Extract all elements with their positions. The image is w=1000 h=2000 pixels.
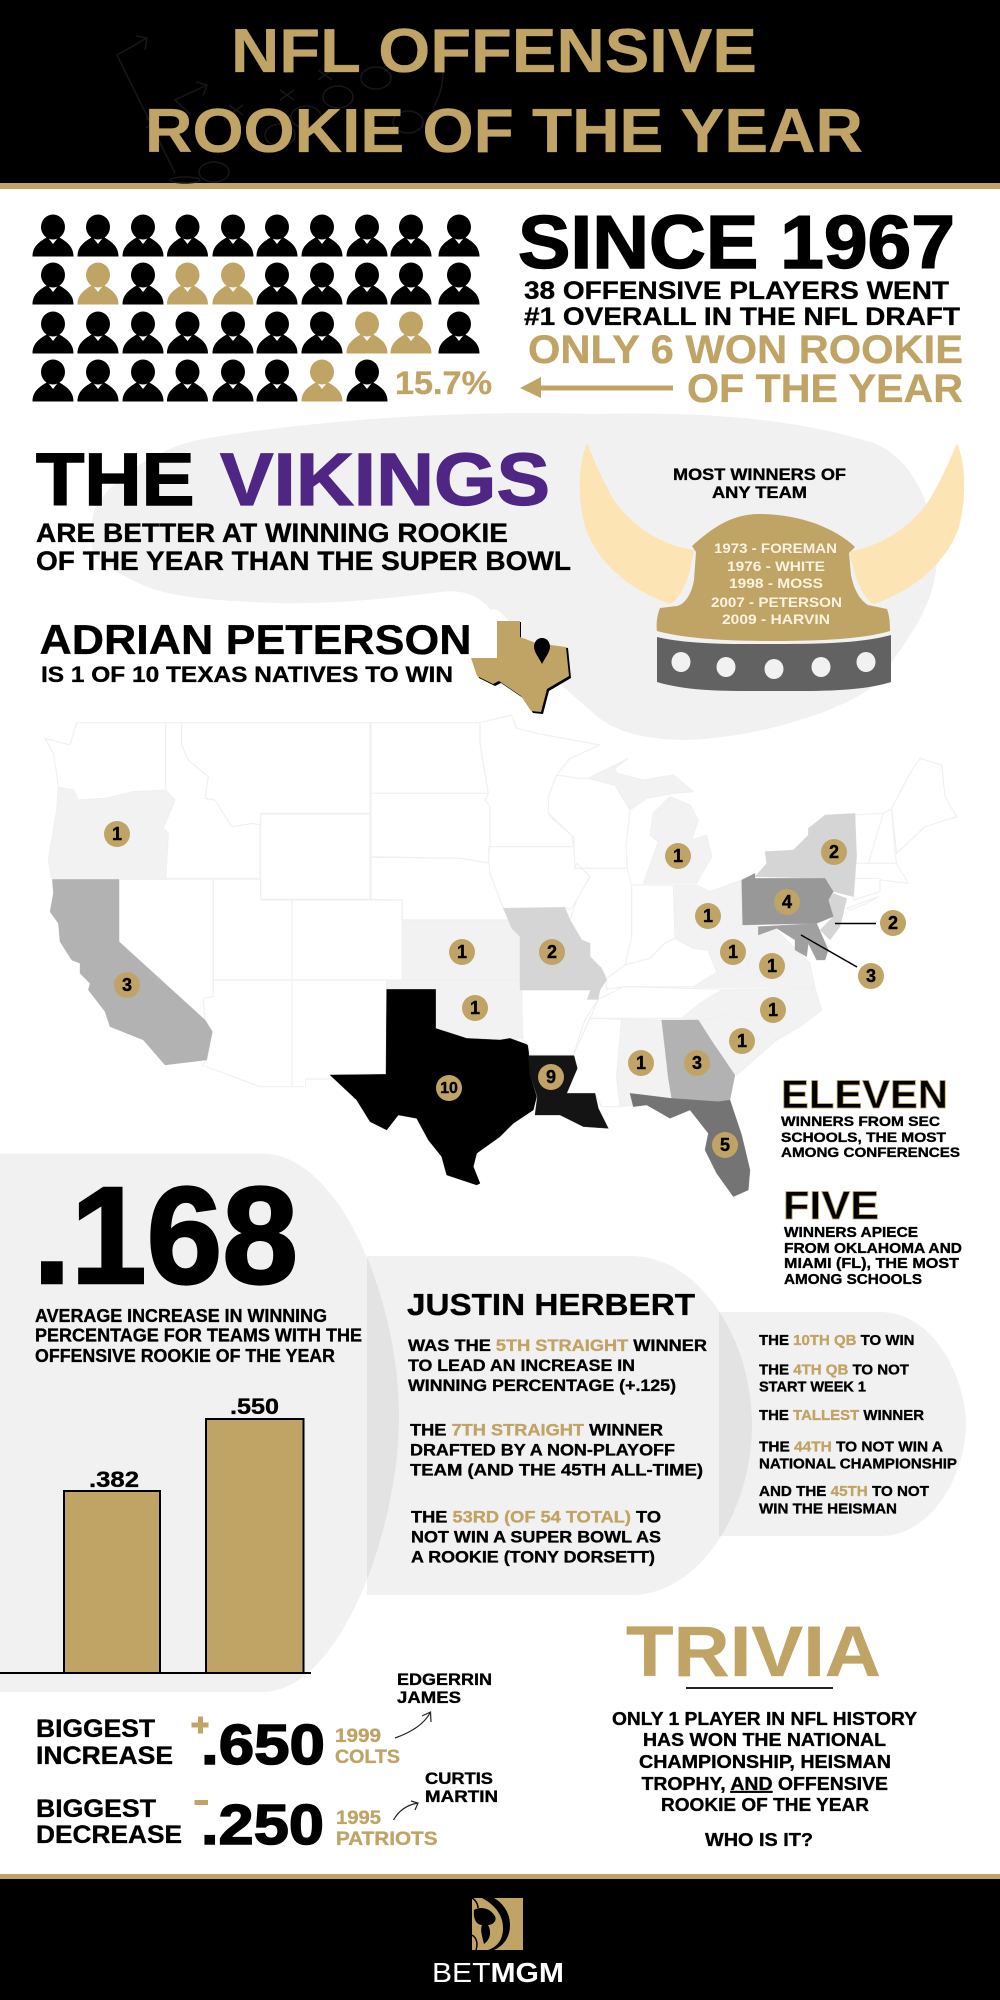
play diagram background — [117, 36, 443, 183]
badge: oregon — [104, 821, 130, 847]
badge: missouri: 2 — [547, 942, 557, 962]
arrow: to curtis martin — [394, 1801, 418, 1820]
five callout: FIVE — [783, 1184, 879, 1228]
badge: california — [114, 972, 140, 998]
herbert list: START WEEK 1 — [759, 1378, 866, 1396]
title: ROOKIE OF THE YEAR — [145, 96, 863, 166]
badge: kansas — [449, 939, 475, 965]
badge: west virginia: 1 — [728, 942, 738, 962]
badge: north carolina — [760, 997, 786, 1023]
big stat .168: .168 — [33, 1159, 298, 1313]
badge: texas: 10 — [440, 1080, 458, 1097]
herbert fact 3: NOT WIN A SUPER BOWL AS — [411, 1528, 661, 1546]
eleven callout: ELEVEN — [781, 1073, 948, 1117]
herbert fact 2 — [410, 1422, 703, 1480]
five callout: FROM OKLAHOMA AND — [784, 1241, 962, 1257]
biggest increase row: COLTS — [335, 1747, 400, 1768]
gold callout: OF THE YEAR — [687, 367, 963, 411]
adrian peterson heading: ADRIAN PETERSON — [40, 616, 472, 663]
herbert fact 2: DRAFTED BY A NON-PLAYOFF — [410, 1442, 675, 1460]
bar .550: .550 — [230, 1394, 279, 1419]
biggest decrease row: 1995 — [336, 1808, 381, 1829]
biggest decrease row: PATRIOTS — [336, 1829, 438, 1850]
herbert list: AND THE 45TH TO NOT — [759, 1483, 929, 1500]
badge: ohio — [695, 903, 721, 929]
badge: pennsylvania — [774, 889, 800, 915]
badge: maryland: 3 — [866, 966, 876, 986]
biggest increase row: BIGGEST — [36, 1715, 155, 1743]
herbert fact 2: THE 7TH STRAIGHT WINNER — [410, 1422, 663, 1440]
trivia question: ONLY 1 PLAYER IN NFL HISTORY — [612, 1709, 917, 1729]
right horn — [848, 443, 964, 604]
pictogram: people grid — [32, 214, 480, 402]
stat description: AVERAGE INCREASE IN WINNING — [35, 1306, 327, 1326]
badge: virginia — [759, 953, 785, 979]
trivia question: CHAMPIONSHIP, HEISMAN — [639, 1752, 891, 1772]
eleven callout: AMONG CONFERENCES — [781, 1144, 960, 1160]
betmgm wordmark: BETMGM — [432, 1957, 564, 1988]
curtis martin label — [425, 1770, 498, 1806]
badge: florida — [712, 1132, 738, 1158]
badge: missouri — [539, 939, 565, 965]
herbert fact 1: TO LEAD AN INCREASE IN — [408, 1357, 635, 1375]
gold callout — [528, 328, 963, 411]
edgerrin james label: EDGERRIN — [397, 1671, 492, 1689]
rivets — [672, 652, 876, 679]
bar .550 — [206, 1394, 304, 1673]
vikings heading — [36, 438, 550, 521]
draft text: #1 OVERALL IN THE NFL DRAFT — [524, 303, 960, 331]
badge: north carolina: 1 — [768, 1000, 778, 1020]
herbert list: THE 44TH TO NOT WIN A — [759, 1438, 943, 1456]
vikings winners list: 2007 - PETERSON — [711, 594, 842, 610]
herbert fact 3 — [411, 1508, 661, 1566]
header band — [0, 0, 1000, 189]
badge: ohio: 1 — [703, 906, 713, 926]
biggest increase row: INCREASE — [36, 1742, 173, 1770]
badge: oklahoma: 1 — [470, 998, 480, 1018]
five callout — [783, 1184, 962, 1288]
leader lines — [801, 924, 876, 967]
badge: pennsylvania: 4 — [782, 892, 792, 912]
vikings subtext: OF THE YEAR THAN THE SUPER BOWL — [36, 546, 571, 576]
biggest decrease row: DECREASE — [36, 1821, 182, 1849]
badge: louisiana — [538, 1064, 564, 1090]
eleven callout: SCHOOLS, THE MOST — [781, 1129, 946, 1145]
biggest decrease row — [36, 1793, 438, 1857]
trivia question: WHO IS IT? — [705, 1830, 813, 1850]
adrian peterson subtext: IS 1 OF 10 TEXAS NATIVES TO WIN — [41, 662, 453, 687]
helmet heading: MOST WINNERS OF — [673, 466, 846, 484]
badge: florida: 5 — [720, 1135, 730, 1155]
trivia question: HAS WON THE NATIONAL — [643, 1730, 886, 1750]
draft text: 38 OFFENSIVE PLAYERS WENT — [524, 277, 949, 305]
left horn — [580, 443, 694, 604]
draft text — [524, 277, 960, 331]
stat description: OFFENSIVE ROOKIE OF THE YEAR — [35, 1346, 335, 1366]
biggest increase row: 1999 — [335, 1726, 381, 1747]
herbert fact 3: A ROOKIE (TONY DORSETT) — [411, 1548, 655, 1566]
badge: louisiana: 9 — [546, 1067, 556, 1087]
trivia heading: TRIVIA — [626, 1613, 881, 1692]
badge: alabama — [628, 1050, 654, 1076]
icon: viking helmet — [580, 443, 964, 691]
badge: oklahoma — [462, 995, 488, 1021]
gold callout: ONLY 6 WON ROOKIE — [528, 328, 963, 372]
bar chart — [0, 1394, 311, 1674]
vikings subtext: ARE BETTER AT WINNING ROOKIE — [36, 518, 508, 548]
badge: new jersey — [880, 910, 906, 936]
trivia question: ROOKIE OF THE YEAR — [661, 1795, 869, 1815]
badge: georgia: 3 — [692, 1053, 702, 1073]
herbert fact 1 — [408, 1337, 707, 1395]
vikings winners list — [711, 540, 842, 627]
five callout: WINNERS APIECE — [784, 1225, 918, 1241]
title: NFL OFFENSIVE — [231, 16, 757, 86]
helmet band — [657, 635, 891, 691]
vikings heading: VIKINGS — [220, 438, 550, 521]
vikings winners list: 1976 - WHITE — [727, 558, 825, 574]
vikings winners list: 1973 - FOREMAN — [714, 540, 837, 556]
arrow: to edgerrin james — [395, 1712, 431, 1738]
eastern states — [480, 715, 957, 1197]
badge: alabama: 1 — [636, 1053, 646, 1073]
eleven callout: WINNERS FROM SEC — [781, 1113, 940, 1129]
eleven callout — [781, 1073, 960, 1160]
herbert fact 1: WAS THE 5TH STRAIGHT WINNER — [408, 1337, 707, 1355]
edgerrin james label: JAMES — [397, 1689, 461, 1707]
stat description: PERCENTAGE FOR TEAMS WITH THE — [35, 1326, 362, 1346]
justin herbert heading: JUSTIN HERBERT — [407, 1287, 695, 1322]
badge: new jersey: 2 — [888, 913, 898, 933]
stat description — [35, 1306, 362, 1366]
badge: west virginia — [720, 939, 746, 965]
badge: oregon: 1 — [112, 824, 122, 844]
trivia question: TROPHY, AND OFFENSIVE — [642, 1774, 888, 1794]
badge: kansas: 1 — [457, 942, 467, 962]
footer — [0, 1874, 1000, 2000]
badge: virginia: 1 — [767, 956, 777, 976]
bar .382 — [64, 1467, 160, 1673]
five callout: MIAMI (FL), THE MOST — [784, 1256, 959, 1272]
panel: third tier blob — [719, 1312, 966, 1536]
herbert list: NATIONAL CHAMPIONSHIP — [759, 1456, 957, 1472]
curtis martin label: CURTIS — [425, 1770, 493, 1788]
herbert list: THE 10TH QB TO WIN — [759, 1332, 914, 1349]
panel: batting average blob — [0, 1154, 399, 1692]
helmet dome — [657, 514, 890, 641]
herbert list: WIN THE HEISMAN — [759, 1500, 897, 1518]
helmet heading — [673, 466, 846, 502]
grey background blob — [92, 413, 937, 740]
biggest increase row: .650 — [201, 1713, 325, 1777]
bar .382: .382 — [89, 1467, 139, 1492]
badge: new york — [821, 839, 847, 865]
biggest decrease row: .250 — [201, 1793, 324, 1857]
vikings subtext — [36, 518, 571, 576]
vikings heading: THE — [36, 438, 194, 521]
western states — [45, 723, 537, 1185]
badge: georgia — [684, 1050, 710, 1076]
logo: lion emblem — [472, 1898, 523, 1950]
arrow: pointing to percentage — [520, 377, 673, 398]
icon: texas with pin — [471, 621, 571, 714]
badge: michigan — [665, 843, 691, 869]
vikings winners list: 1998 - MOSS — [729, 575, 823, 591]
badge: michigan: 1 — [673, 846, 683, 866]
title — [145, 16, 863, 166]
herbert list — [759, 1332, 957, 1518]
badge: south carolina — [729, 1028, 755, 1054]
five callout: AMONG SCHOOLS — [784, 1272, 922, 1288]
badge: new york: 2 — [829, 842, 839, 862]
since 1967 heading: SINCE 1967 — [518, 200, 955, 284]
herbert fact 1: WINNING PERCENTAGE (+.125) — [408, 1377, 676, 1395]
state count badges — [104, 821, 906, 1158]
badge: south carolina: 1 — [737, 1031, 747, 1051]
herbert fact 3: THE 53RD (OF 54 TOTAL) TO — [411, 1508, 661, 1526]
badge: california: 3 — [122, 975, 132, 995]
badge: texas — [436, 1075, 462, 1101]
biggest decrease row: BIGGEST — [36, 1795, 156, 1823]
biggest increase row — [36, 1713, 400, 1777]
trivia question — [612, 1709, 917, 1850]
herbert fact 2: TEAM (AND THE 45TH ALL-TIME) — [410, 1462, 703, 1480]
map of united states — [45, 715, 957, 1197]
vikings winners list: 2009 - HARVIN — [722, 611, 830, 627]
curtis martin label: MARTIN — [425, 1788, 498, 1806]
badge: maryland — [858, 963, 884, 989]
edgerrin james label — [397, 1671, 492, 1707]
percentage label: 15.7% — [395, 365, 492, 401]
helmet heading: ANY TEAM — [712, 484, 807, 502]
herbert list: THE 4TH QB TO NOT — [759, 1362, 909, 1378]
herbert list: THE TALLEST WINNER — [759, 1407, 924, 1424]
panel: justin herbert blob — [367, 1256, 752, 1595]
